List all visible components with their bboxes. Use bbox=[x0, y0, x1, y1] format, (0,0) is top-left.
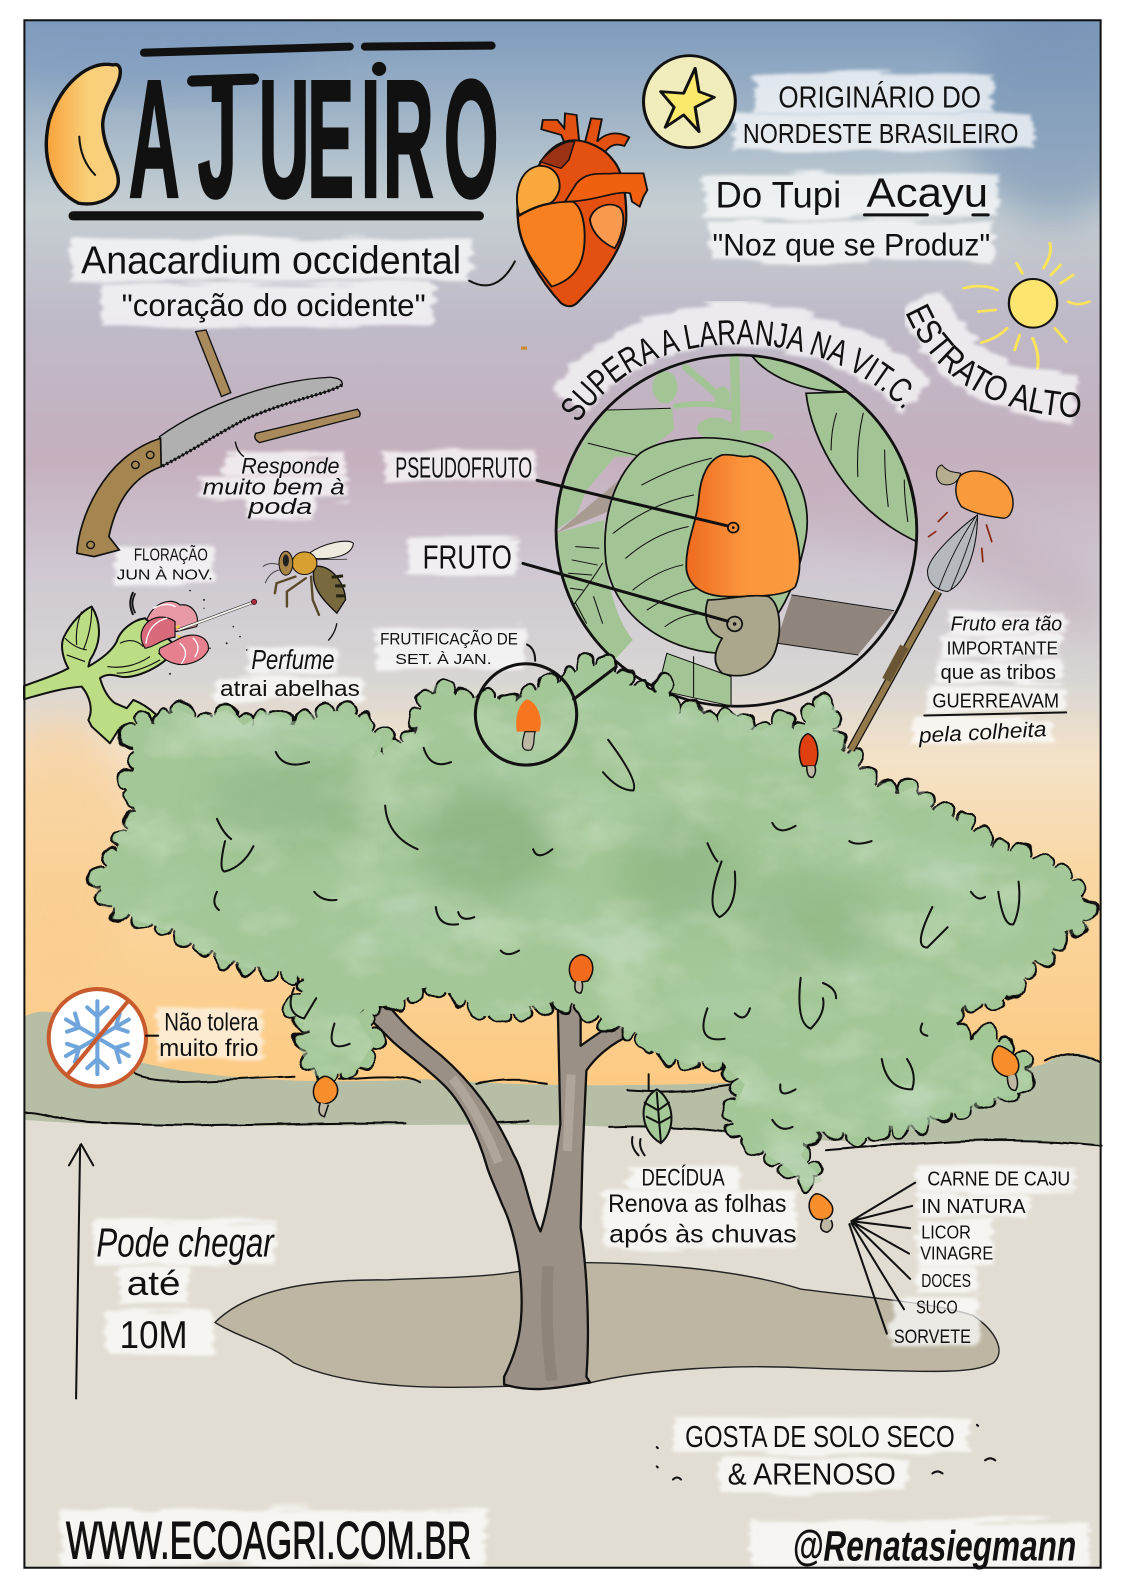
scientific name bbox=[81, 240, 461, 323]
small circle highlighting fruit on tree bbox=[475, 664, 616, 765]
uses of cashew with fan of lines: VINAGRE bbox=[920, 1243, 993, 1264]
text: deciduous: após às chuvas bbox=[609, 1220, 797, 1248]
text: upper stratum (curved): ESTRATO ALTO bbox=[906, 304, 1080, 418]
magnifier lens with cashew fruit bbox=[556, 355, 917, 706]
text: deciduous bbox=[608, 1165, 797, 1248]
text: soil preference: & ARENOSO bbox=[728, 1458, 896, 1492]
text: fruit importance bbox=[917, 613, 1066, 748]
label: fruto with leader line bbox=[423, 540, 728, 621]
icon: cashew flower and branch bbox=[24, 590, 257, 743]
text: flowering period: JUN À NOV. bbox=[117, 567, 213, 584]
height arrow bbox=[69, 1144, 93, 1398]
scientific name: "coração do ocidente" bbox=[122, 288, 426, 323]
uses of cashew with fan of lines bbox=[849, 1169, 1070, 1348]
ground shadow under tree bbox=[215, 1263, 999, 1387]
uses of cashew with fan of lines: IN NATURA bbox=[921, 1196, 1026, 1218]
icon: cashew nut forming the letter C bbox=[46, 64, 120, 204]
text: flowering period bbox=[117, 544, 213, 614]
icon: sun bbox=[964, 243, 1089, 368]
label: fruto with leader line: FRUTO bbox=[423, 540, 512, 577]
uses of cashew with fan of lines: SUCO bbox=[916, 1296, 958, 1317]
text: tupi etymology: "Noz que se Produz" bbox=[712, 227, 990, 262]
text: origin: NORDESTE BRASILEIRO bbox=[743, 118, 1019, 149]
text: height: 10M bbox=[120, 1314, 188, 1357]
text: pruning note: Responde bbox=[241, 453, 340, 478]
text: perfume attracts bees: Perfume bbox=[251, 644, 334, 675]
text: fruit importance: pela colheita bbox=[917, 717, 1047, 748]
text: tupi etymology bbox=[712, 170, 990, 262]
text: pruning note: muito bem à bbox=[203, 475, 345, 500]
icon: bee bbox=[263, 541, 353, 641]
scientific name: Anacardium occidental bbox=[81, 240, 461, 283]
cashew fruits on tree bbox=[313, 734, 1019, 1232]
small orange paint speck bbox=[521, 347, 527, 350]
icon: pruning saw and branches bbox=[77, 330, 360, 557]
text: vitamin C (curved): SUPERA A LARANJA NA VIT.C. bbox=[562, 320, 912, 420]
pointer to heart bbox=[469, 261, 515, 285]
icon: star badge bbox=[643, 56, 735, 148]
uses of cashew with fan of lines: DOCES bbox=[921, 1270, 971, 1291]
uses of cashew with fan of lines: LICOR bbox=[921, 1221, 971, 1242]
text: flowering period: FLORAÇÃO bbox=[134, 544, 208, 564]
text: fruit importance: que as tribos bbox=[941, 662, 1056, 684]
icon: no frost sign bbox=[49, 989, 158, 1086]
text: tupi etymology: Acayu bbox=[867, 170, 988, 216]
tree foliage bbox=[81, 649, 1105, 1196]
text: origin: ORIGINÁRIO DO bbox=[778, 80, 981, 114]
text: perfume attracts bees: atrai abelhas bbox=[220, 676, 360, 701]
text: origin bbox=[743, 80, 1019, 149]
title: AJUEIRO bbox=[129, 47, 498, 233]
text: fruit importance: Fruto era tão bbox=[951, 613, 1062, 635]
text: height: Pode chegar bbox=[96, 1220, 275, 1266]
label: pseudofruto with leader line bbox=[395, 452, 728, 526]
text: cold intolerance: Não tolera bbox=[164, 1009, 259, 1037]
text: fruit importance: IMPORTANTE bbox=[947, 638, 1058, 659]
text: tupi etymology: Do Tupi bbox=[716, 174, 841, 216]
text: perfume attracts bees bbox=[220, 644, 360, 701]
uses of cashew with fan of lines: CARNE DE CAJU bbox=[927, 1169, 1070, 1191]
uses of cashew with fan of lines: SORVETE bbox=[894, 1327, 971, 1348]
text: fruit importance: GUERREAVAM bbox=[932, 690, 1059, 712]
text: fruiting period bbox=[380, 629, 535, 668]
tree trunk bbox=[366, 1002, 632, 1389]
text: fruiting period: FRUTIFICAÇÃO DE bbox=[380, 629, 518, 649]
text: soil preference bbox=[657, 1420, 995, 1492]
text: soil preference: GOSTA DE SOLO SECO bbox=[685, 1420, 955, 1454]
text: deciduous: DECÍDUA bbox=[642, 1165, 725, 1192]
icon: anatomical heart bbox=[517, 113, 647, 306]
text: height bbox=[96, 1220, 275, 1357]
icon: leaf falling bbox=[632, 1074, 671, 1155]
text: cold intolerance bbox=[159, 1009, 259, 1062]
text: pruning note bbox=[203, 453, 345, 519]
text: cold intolerance: muito frio bbox=[159, 1035, 258, 1062]
text: deciduous: Renova as folhas bbox=[608, 1190, 786, 1218]
text: fruiting period: SET. À JAN. bbox=[395, 651, 492, 668]
text: height: até bbox=[127, 1265, 180, 1303]
label: pseudofruto with leader line: PSEUDOFRUTO bbox=[395, 452, 532, 484]
icon: spear with cashew apple bbox=[851, 465, 1013, 750]
text: pruning note: poda bbox=[247, 494, 312, 519]
hill and ground outlines bbox=[24, 1054, 1101, 1150]
website: WWW.ECOAGRI.COM.BR bbox=[66, 1512, 471, 1571]
